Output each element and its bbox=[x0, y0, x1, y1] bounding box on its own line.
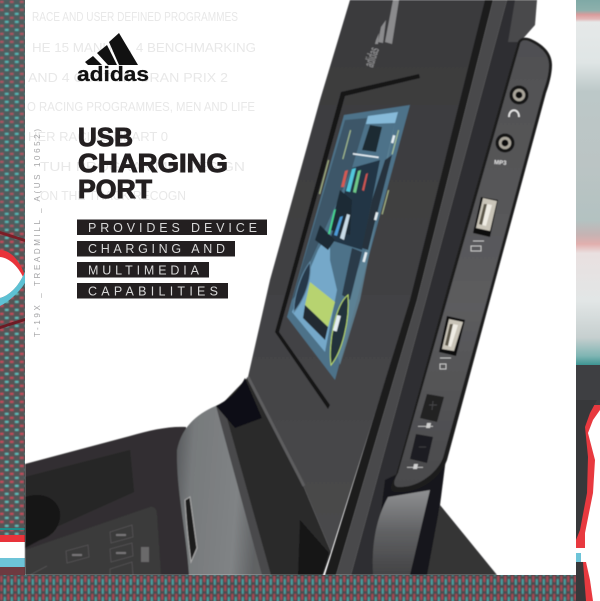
mp3 label: MP3 bbox=[494, 160, 507, 167]
wordmark: adidas bbox=[77, 64, 149, 86]
upper usb port bbox=[473, 197, 498, 237]
stand foot bbox=[425, 505, 497, 575]
side port panel bbox=[391, 38, 552, 492]
volume down label bbox=[407, 464, 423, 469]
lower glossy reflection bbox=[298, 520, 329, 575]
handle recess bbox=[25, 450, 134, 541]
title bbox=[78, 122, 228, 204]
faint background spec text: TUH PROGRAMME, DESIGN bbox=[40, 159, 245, 174]
volume up button bbox=[420, 394, 444, 422]
console face adidas mark: adidas bbox=[361, 45, 382, 69]
black bezel groove bbox=[325, 0, 493, 575]
faint background spec text bbox=[27, 9, 256, 203]
adidas logo bbox=[77, 33, 149, 86]
left glitch strip bbox=[0, 0, 25, 575]
lower usb icon bbox=[440, 358, 451, 369]
face left edge highlight bbox=[248, 377, 304, 486]
upper and lower screen recess line bbox=[275, 74, 420, 409]
lower usb port bbox=[439, 316, 465, 356]
right bezel channel bbox=[351, 0, 528, 575]
roller edge strip bbox=[216, 404, 271, 575]
upper usb icon bbox=[471, 241, 484, 251]
grey bezel strip bbox=[336, 0, 507, 575]
screen bbox=[287, 105, 410, 380]
console main face bbox=[248, 0, 487, 552]
vertical model label: T-19X _ TREADMILL _ A(US 10652) bbox=[33, 129, 42, 337]
mp3 jack bbox=[496, 134, 514, 152]
three bars bbox=[85, 33, 138, 65]
silver roller bbox=[177, 405, 264, 575]
upright rear housing bbox=[508, 0, 537, 42]
headphone jack bbox=[510, 86, 528, 104]
title: PORT bbox=[78, 174, 152, 204]
title: CHARGING bbox=[78, 148, 228, 178]
faint background spec text: O RACING PROGRAMMES, MEN AND LIFE bbox=[27, 99, 255, 114]
tag: charging and: CHARGING AND bbox=[88, 242, 225, 256]
bottom glitch strip bbox=[0, 575, 576, 601]
handle well bbox=[25, 495, 60, 548]
faint background spec text: ON THE TRACK RECOGN bbox=[40, 188, 186, 203]
faint background spec text: RACE AND USER DEFINED PROGRAMMES bbox=[32, 9, 238, 24]
roller slot bbox=[185, 497, 197, 562]
tag: capabilities: CAPABILITIES bbox=[88, 284, 218, 298]
volume down button bbox=[410, 434, 433, 463]
faint background spec text: AND 4 CUSTOM GRAN PRIX 2 bbox=[28, 70, 228, 85]
screen speed dial bbox=[330, 295, 348, 365]
faint background spec text: HE 15 MANUAL, 4 BENCHMARKING bbox=[32, 40, 256, 55]
subtitle tags bbox=[77, 220, 267, 298]
screen data panel bbox=[305, 282, 335, 327]
keypad panel bbox=[25, 507, 161, 575]
right glitch strip bbox=[576, 0, 600, 601]
hinge gap bbox=[216, 378, 262, 428]
title: USB bbox=[78, 122, 133, 152]
dark stem bbox=[373, 450, 447, 575]
volume up label bbox=[418, 423, 433, 428]
faint background spec text: HER RACING HEART 0 bbox=[28, 129, 168, 144]
screen metric bars bbox=[328, 168, 368, 240]
deck base bbox=[25, 427, 210, 575]
tag: provides device: PROVIDES DEVICE bbox=[88, 221, 257, 235]
headphone icon bbox=[509, 110, 519, 117]
dark lower band bbox=[220, 377, 331, 575]
console face adidas mark bbox=[361, 0, 399, 69]
glossy lower column bbox=[373, 490, 430, 575]
tag: multimedia: MULTIMEDIA bbox=[88, 264, 200, 278]
